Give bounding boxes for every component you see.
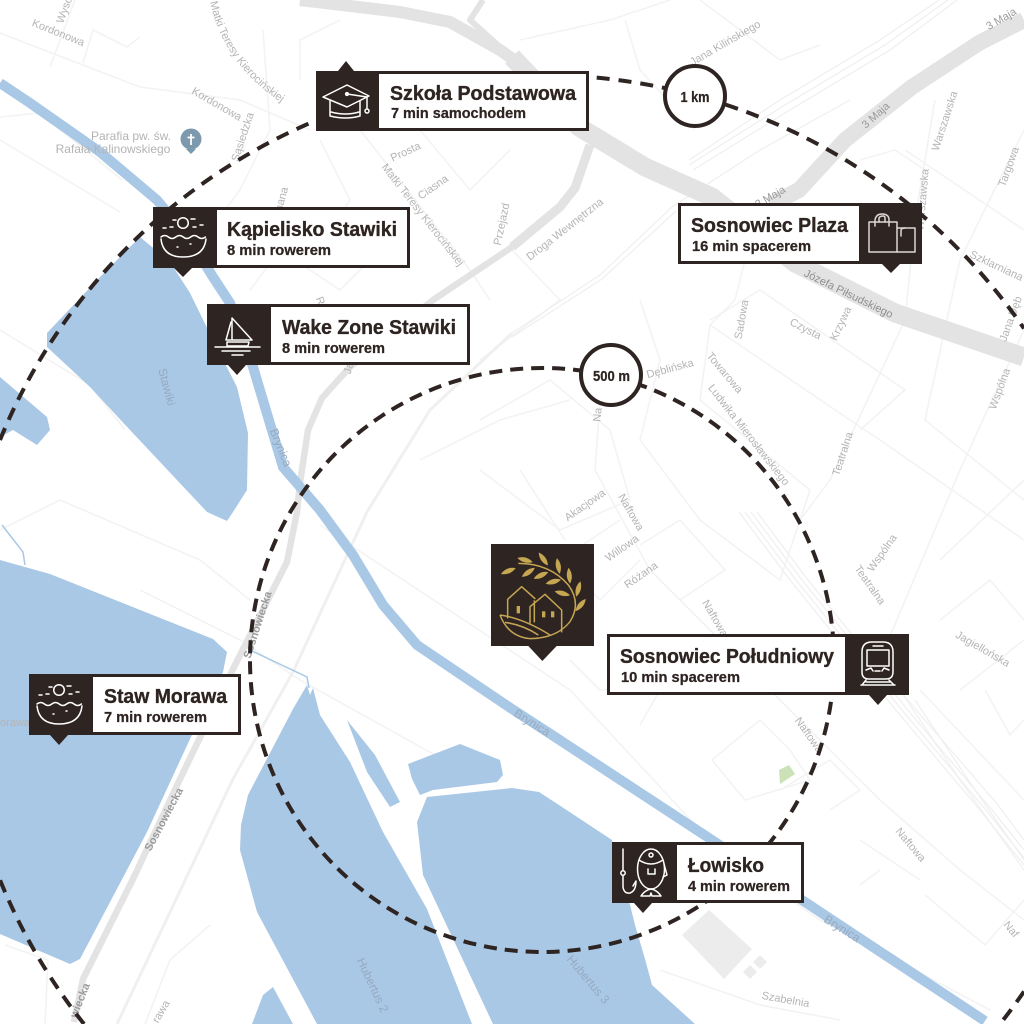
badge: 500 m xyxy=(581,345,641,405)
icon: sailboat xyxy=(215,318,260,355)
label: Szkoła Podstawowa: Szkoła Podstawowa xyxy=(390,83,577,105)
label: Staw Morawa: 7 min rowerem xyxy=(104,710,207,726)
small lake west xyxy=(0,377,50,445)
lake south small xyxy=(252,987,293,1024)
street names: Wspólna xyxy=(987,366,1013,411)
lake Morawa xyxy=(0,560,227,964)
label: Kąpielisko Stawiki xyxy=(153,207,408,277)
icon: fish and hook xyxy=(621,849,667,896)
street names: Matki Teresy Kierocińskiej xyxy=(210,1,285,104)
lake Hubertus 2 xyxy=(240,685,472,1024)
street names: Prosta xyxy=(389,140,423,164)
street names: Jana Kilińskiego xyxy=(688,18,763,68)
street names: Szklarniana xyxy=(968,249,1024,284)
street names: Sadowa xyxy=(733,298,752,340)
street names: Ja xyxy=(342,360,357,375)
street names: Hubertus 3 xyxy=(564,952,613,1007)
street names: Naftowa xyxy=(615,492,646,534)
street names: Dęblińska xyxy=(645,357,696,381)
street names: Kordonowa xyxy=(189,85,244,124)
500 m radius circle xyxy=(250,368,834,952)
icon: bathing lake xyxy=(161,218,206,257)
label: Łowisko: 4 min rowerem xyxy=(688,879,790,895)
street names: Czysta xyxy=(788,316,824,343)
street names: Jagiellońska xyxy=(953,629,1012,670)
label: Sosnowiec Plaza: Sosnowiec Plaza xyxy=(691,215,849,237)
street names: Ciasna xyxy=(416,172,451,202)
green patch xyxy=(779,765,795,784)
street names: wiecka xyxy=(68,981,93,1021)
label: Sosnowiec Plaza: 16 min spacerem xyxy=(692,239,811,255)
street names: Wspólna xyxy=(865,532,900,574)
label: Szkoła Podstawowa xyxy=(316,61,588,131)
icon: lake xyxy=(37,685,82,724)
street names: Ludwika Mierosławskiego xyxy=(705,382,791,488)
street names: Teatralna xyxy=(852,563,888,608)
street names: Stawiki xyxy=(155,367,179,407)
arc and swoosh xyxy=(500,563,575,639)
label: Sosnowiec Południowy: 10 min spacerem xyxy=(621,670,740,686)
street names: 3 Maja xyxy=(984,6,1020,33)
street names: Krzywa xyxy=(828,304,855,343)
street names: Willowa xyxy=(603,532,642,564)
small pond xyxy=(408,744,503,795)
street names: Kordonowa xyxy=(30,17,87,50)
label: Sosnowiec Plaza xyxy=(680,203,922,273)
badge: 500 m: 500 m xyxy=(593,369,630,385)
street names: Droga Wewnętrzna xyxy=(524,195,607,263)
street names: R xyxy=(313,295,327,307)
badge: 1 km xyxy=(665,66,725,126)
streams xyxy=(2,525,309,688)
label: Kąpielisko Stawiki: 8 min rowerem xyxy=(227,243,331,259)
street names: Rafała Kalinowskiego xyxy=(56,142,171,156)
street names: Warszawska xyxy=(930,89,961,152)
street names: Brynica xyxy=(821,912,863,945)
lake Stawiki xyxy=(47,237,248,521)
street names: Józefa Piłsudskiego xyxy=(802,268,895,321)
label: Staw Morawa: Staw Morawa xyxy=(104,686,228,708)
street names: Brynica xyxy=(267,426,295,469)
street names: Różana xyxy=(622,559,661,591)
label: Kąpielisko Stawiki: Kąpielisko Stawiki xyxy=(227,219,397,241)
houses xyxy=(508,587,562,632)
street names: Teatralna xyxy=(830,430,856,477)
street names: Naftowa xyxy=(792,715,825,756)
label: Wake Zone Stawiki xyxy=(207,304,468,375)
street names: Przejazd xyxy=(492,202,512,247)
label: Wake Zone Stawiki: Wake Zone Stawiki xyxy=(282,317,456,339)
street names: Sąsiedzka xyxy=(230,110,257,163)
lake sliver xyxy=(347,720,400,807)
icon: shopping bags xyxy=(869,214,915,252)
icon: graduation cap xyxy=(323,85,369,118)
label: Staw Morawa xyxy=(29,674,240,745)
street names: orawa xyxy=(0,717,31,729)
logo marker xyxy=(491,544,594,661)
street names: nana xyxy=(273,185,291,213)
label: Szkoła Podstawowa: 7 min samochodem xyxy=(391,106,526,122)
street names: Sosnowiecka xyxy=(143,785,186,853)
street names: Akacjowa xyxy=(563,487,609,524)
street names: Szabelnia xyxy=(761,990,811,1010)
street names: Warszawska xyxy=(914,167,932,231)
street names: Hubertus 2 xyxy=(354,956,392,1015)
label: Sosnowiec Południowy xyxy=(608,634,909,705)
street names: 3 Maja xyxy=(860,100,893,131)
street names: Naftowa xyxy=(699,598,730,640)
icon: train xyxy=(861,642,895,685)
street names: Parafia pw. św. xyxy=(91,129,171,143)
street names: Na xyxy=(591,406,605,422)
street names: Matki Teresy Kierocińskiej xyxy=(379,162,466,269)
label: Łowisko xyxy=(612,842,802,913)
street names: 3 Maja xyxy=(753,184,789,211)
street names: Targowa xyxy=(996,145,1022,189)
street names: Sosnowiecka xyxy=(242,589,275,660)
label: Wake Zone Stawiki: 8 min rowerem xyxy=(282,341,385,357)
street names: Brynica xyxy=(511,706,553,739)
label: Łowisko: Łowisko xyxy=(688,855,764,877)
icon: church pin xyxy=(180,128,202,154)
street names: Naftowa xyxy=(893,826,928,865)
badge: 1 km: 1 km xyxy=(680,90,710,106)
lake Hubertus 3 xyxy=(417,788,695,1024)
street names: Towarowa xyxy=(704,350,745,397)
street names: Naf xyxy=(1001,919,1022,941)
grey building block xyxy=(682,910,767,979)
leaves xyxy=(500,551,588,613)
label: Sosnowiec Południowy: Sosnowiec Południowy xyxy=(620,646,835,668)
